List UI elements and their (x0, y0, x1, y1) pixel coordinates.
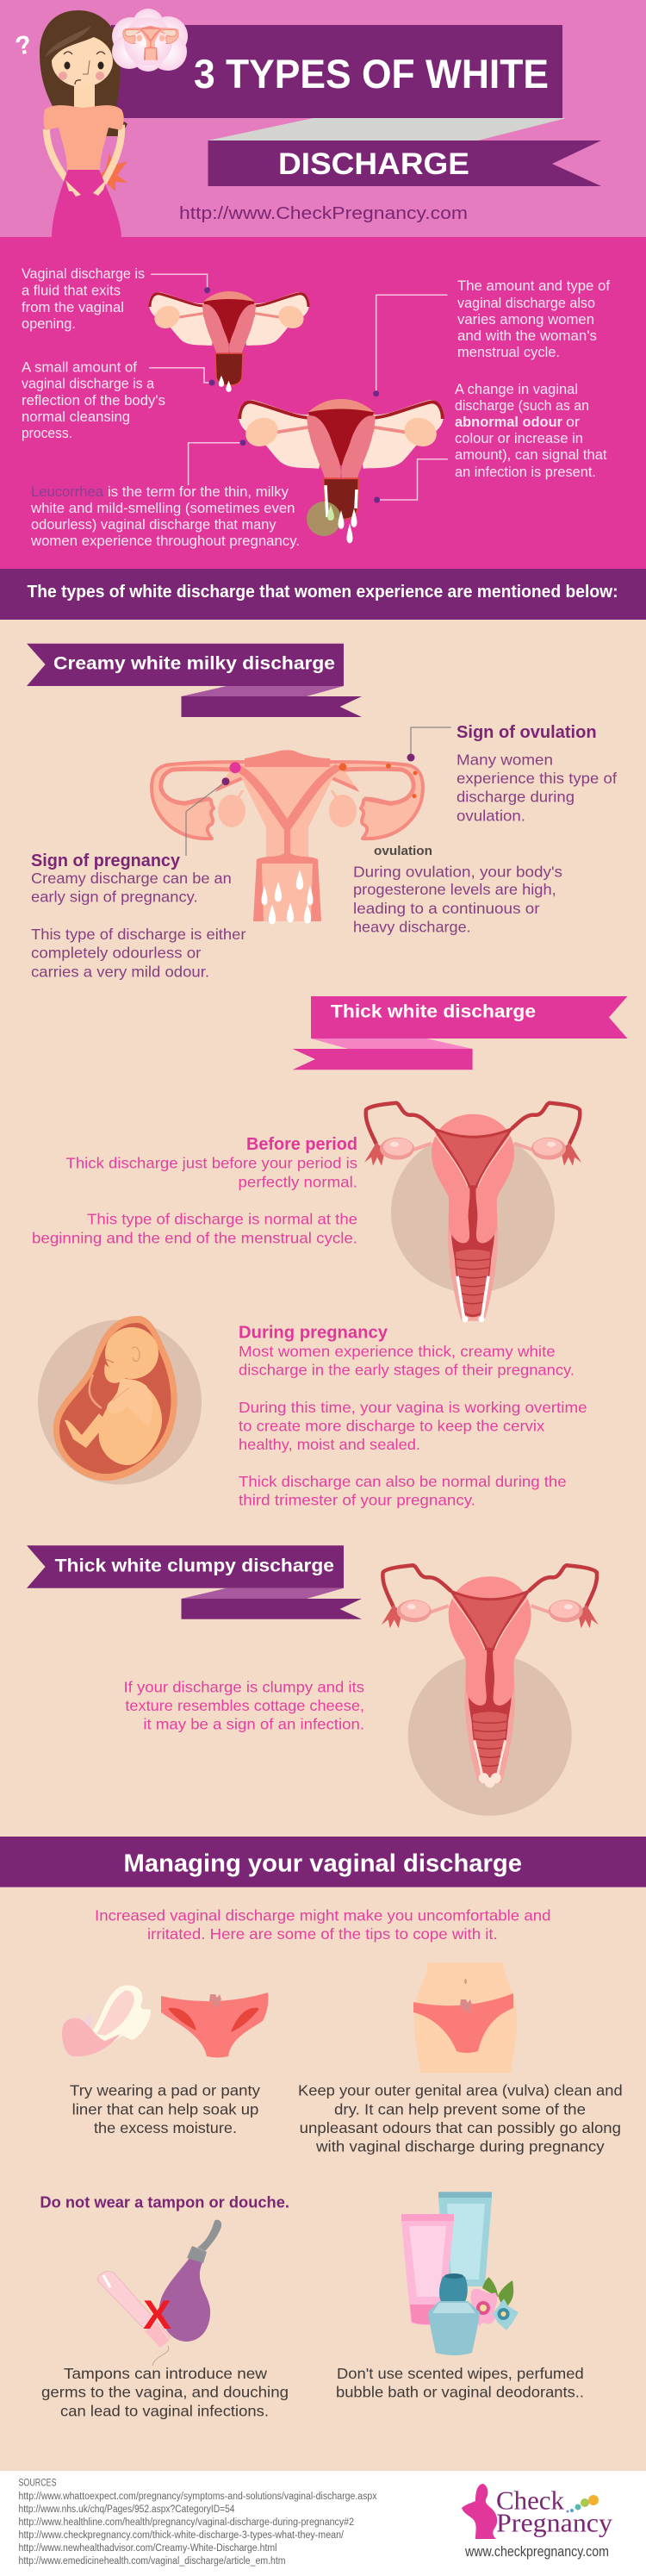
text: sign of ovulation: experience this type of (457, 770, 617, 787)
text: what is vaginal discharge: a fluid that exits (22, 283, 121, 299)
text: before period: beginning and the end of the menstrual cycle. (32, 1229, 357, 1246)
icon: question mark: ? (13, 30, 34, 61)
text: during pregnancy: During pregnancy (239, 1324, 388, 1343)
text: sign of pregnancy: early sign of pregnancy. (31, 889, 198, 906)
text: keep clean tip: dry. It can help prevent some of the (334, 2100, 586, 2118)
text: tampon tip (41, 2365, 289, 2419)
text: amount and type varies: vaginal discharge also (457, 295, 595, 311)
text: amount and type varies: varies among women (457, 311, 594, 327)
icon: tampon and douche with red cross: X (143, 2292, 171, 2337)
icon: sanitary pad (62, 1986, 151, 2056)
text: sign of pregnancy: Sign of pregnancy (31, 851, 181, 870)
text: what is vaginal discharge: from the vaginal (22, 299, 124, 315)
text: change in discharge: A change in vaginal (455, 381, 578, 397)
text: what is vaginal discharge: opening. (22, 315, 76, 332)
text: during pregnancy: discharge in the early stages of their pregnancy. (239, 1362, 575, 1379)
text: before period (32, 1135, 357, 1246)
icon: lower body in underwear (413, 1962, 517, 2073)
ribbon: thick white discharge (293, 996, 627, 1070)
text: amount and type varies (457, 278, 610, 360)
text: sign of pregnancy (31, 851, 246, 980)
banner: managing your vaginal discharge (0, 1837, 646, 1887)
illustration: uterus before period (364, 1103, 581, 1322)
text: small amount of discharge: reflection of the body's (22, 392, 165, 409)
footer: sources: http://www.nhs.uk/chq/Pages/952.aspx?CategoryID=54 (19, 2504, 235, 2515)
text: sign of pregnancy: Creamy discharge can be an (31, 870, 232, 887)
text: tampon tip: can lead to vaginal infections. (60, 2402, 269, 2419)
banner: types of white discharge: The types of white discharge that women experience are mentioned below: (28, 583, 618, 602)
text: leucorrhea: is the term for the thin, milky (108, 483, 289, 500)
text: during ovulation: heavy discharge. (353, 919, 471, 936)
icon: scented products (401, 2192, 519, 2355)
text: sign of pregnancy: completely odourless or (31, 945, 202, 962)
text: pad tip: liner that can help soak up (72, 2100, 258, 2118)
footer: sources: http://www.whattoexpect.com/pregnancy/symptoms-and-solutions/vaginal-discharge.aspx (19, 2492, 377, 2502)
banner: types of white discharge (0, 569, 646, 620)
text: sign of ovulation: discharge during (457, 788, 575, 805)
text: clumpy discharge infection: If your discharge is clumpy and its (124, 1678, 364, 1695)
footer: sources (19, 2479, 377, 2567)
footer: sources: http://www.newhealthadvisor.com/Creamy-White-Discharge.html (19, 2543, 277, 2554)
text: during ovulation: leading to a continuous or (353, 900, 540, 917)
text: scented products tip (336, 2365, 584, 2401)
text: during pregnancy: third trimester of your pregnancy. (239, 1492, 475, 1509)
text: small amount of discharge (22, 359, 165, 441)
text: what is vaginal discharge: Vaginal discharge is (22, 265, 145, 282)
text: change in discharge: abnormal odour (455, 414, 562, 430)
text: pad tip: the excess moisture. (94, 2119, 237, 2136)
text: pad tip (70, 2082, 260, 2136)
text: during pregnancy: healthy, moist and sealed. (239, 1436, 420, 1453)
website url: http://www.CheckPregnancy.com (179, 204, 468, 223)
footer: sources: http://www.healthline.com/health/pregnancy/vaginal-discharge-during-pregnancy#2 (19, 2517, 354, 2528)
text: leucorrhea: women experience throughout pregnancy. (30, 533, 300, 549)
text: tampon tip: germs to the vagina, and douching (41, 2384, 289, 2401)
header section background (0, 0, 646, 237)
text: keep clean tip (298, 2082, 623, 2155)
text: change in discharge (455, 381, 607, 480)
text: during pregnancy: During this time, your vagina is working overtime (239, 1399, 587, 1416)
title ribbon (111, 25, 601, 186)
text: during pregnancy: Thick discharge can also be normal during the (239, 1473, 567, 1490)
text: change in discharge: an infection is present. (455, 464, 596, 480)
illustration: uterus with discharge and infection (239, 399, 444, 543)
icon: underwear (161, 1993, 268, 2058)
text: sign of ovulation (457, 723, 617, 824)
text: clumpy discharge infection: it may be a sign of an infection. (143, 1716, 364, 1733)
text: keep clean tip: Keep your outer genital area (vulva) clean and (298, 2082, 623, 2099)
text: keep clean tip: with vaginal discharge during pregnancy (315, 2138, 605, 2155)
text: clumpy discharge infection: texture resembles cottage cheese, (125, 1697, 364, 1714)
text: during ovulation (353, 863, 562, 936)
illustration: fetus in womb (38, 1316, 202, 1484)
page cream background (0, 620, 646, 2471)
text: small amount of discharge: A small amount of (22, 359, 137, 376)
intro section background (0, 237, 646, 569)
illustration: uterus with clumpy discharge (382, 1565, 599, 1816)
text: intro to tips: Increased vaginal discharge might make you uncomfortable and (95, 1906, 551, 1924)
text: intro to tips (95, 1906, 551, 1943)
text: leucorrhea (30, 483, 300, 549)
text: change in discharge: colour or increase in (455, 430, 583, 446)
website text in footer: www.checkpregnancy.com (464, 2543, 609, 2560)
ribbon: thick white clumpy discharge (27, 1545, 362, 1619)
text: change in discharge: or (566, 414, 580, 430)
text: amount and type varies: and with the woman's (457, 327, 597, 344)
ribbon: thick white clumpy discharge: Thick white clumpy discharge (55, 1556, 334, 1575)
text: change in discharge: discharge (such as an (455, 397, 589, 414)
text: keep clean tip: unpleasant odours that can possibly go along (300, 2119, 621, 2136)
text: pad tip: Try wearing a pad or panty (70, 2082, 260, 2099)
text: during pregnancy: Most women experience thick, creamy white (239, 1343, 556, 1360)
callout lines: pregnancy and ovulation (186, 727, 451, 856)
illustration: pale uterus with discharge drops (152, 750, 423, 924)
banner: managing your vaginal discharge: Managing your vaginal discharge (124, 1850, 522, 1878)
text: before period: Before period (246, 1135, 357, 1154)
text: sign of pregnancy: carries a very mild odour. (31, 963, 209, 980)
text: intro to tips: irritated. Here are some of the tips to cope with it. (147, 1925, 498, 1943)
text: small amount of discharge: process. (22, 425, 72, 441)
footer: sources: SOURCES (19, 2479, 57, 2489)
text: before period: This type of discharge is normal at the (87, 1211, 357, 1228)
text: scented products tip: bubble bath or vaginal deodorants.. (336, 2384, 584, 2401)
heading: do not wear a tampon: Do not wear a tampon or douche. (40, 2194, 289, 2211)
text: during ovulation: During ovulation, your body's (353, 863, 562, 880)
text: before period: perfectly normal. (238, 1174, 357, 1191)
text: what is vaginal discharge (22, 265, 145, 332)
text: sign of pregnancy: This type of discharge is either (31, 926, 246, 943)
illustration: worried woman (40, 10, 127, 237)
text: during pregnancy: to create more discharge to keep the cervix (239, 1418, 545, 1435)
logo: check pregnancy: Pregnancy (496, 2507, 613, 2537)
text: amount and type varies: The amount and type of (457, 278, 610, 294)
illustration: uterus with small discharge (149, 291, 309, 392)
ribbon: creamy white milky discharge: Creamy white milky discharge (53, 654, 335, 674)
text: change in discharge: amount), can signal that (455, 446, 607, 463)
connector lines and dots (149, 274, 448, 503)
text: leucorrhea: white and mild-smelling (sometimes even (30, 500, 295, 516)
logo: check pregnancy (462, 2484, 613, 2539)
text: during ovulation: progesterone levels are high, (353, 881, 556, 898)
text: amount and type varies: menstrual cycle. (457, 344, 560, 360)
title text (194, 51, 549, 181)
text: tampon tip: Tampons can introduce new (64, 2365, 267, 2382)
text: sign of ovulation: Sign of ovulation (457, 723, 597, 742)
title text: 3 TYPES OF WHITE (194, 51, 549, 97)
logo: check pregnancy: Check (496, 2486, 564, 2516)
text: leucorrhea: Leucorrhea (31, 483, 104, 500)
footer: sources: http://www.emedicinehealth.com/vaginal_discharge/article_em.htm (19, 2556, 286, 2567)
label: ovulation: ovulation (374, 844, 432, 858)
text: sign of ovulation: Many women (457, 751, 553, 768)
text: before period: Thick discharge just before your period is (65, 1155, 357, 1172)
footer: sources: http://www.checkpregnancy.com/thick-white-discharge-3-types-what-they-mean/ (19, 2530, 345, 2541)
icon: thought bubble with uterus (112, 9, 188, 72)
ribbon: thick white discharge: Thick white discharge (331, 1002, 536, 1022)
text: sign of ovulation: ovulation. (457, 807, 525, 824)
title text: DISCHARGE (278, 147, 469, 181)
text: during pregnancy (239, 1324, 587, 1509)
text: clumpy discharge infection (124, 1678, 364, 1733)
text: scented products tip: Don't use scented wipes, perfumed (337, 2365, 584, 2382)
text: small amount of discharge: normal cleansing (22, 409, 130, 425)
text: small amount of discharge: vaginal discharge is a (22, 376, 155, 392)
text: leucorrhea: odourless) vaginal discharge that many (31, 516, 276, 533)
icon: tampon and douche with red cross (97, 2220, 221, 2366)
ribbon: creamy white milky discharge (27, 644, 362, 717)
